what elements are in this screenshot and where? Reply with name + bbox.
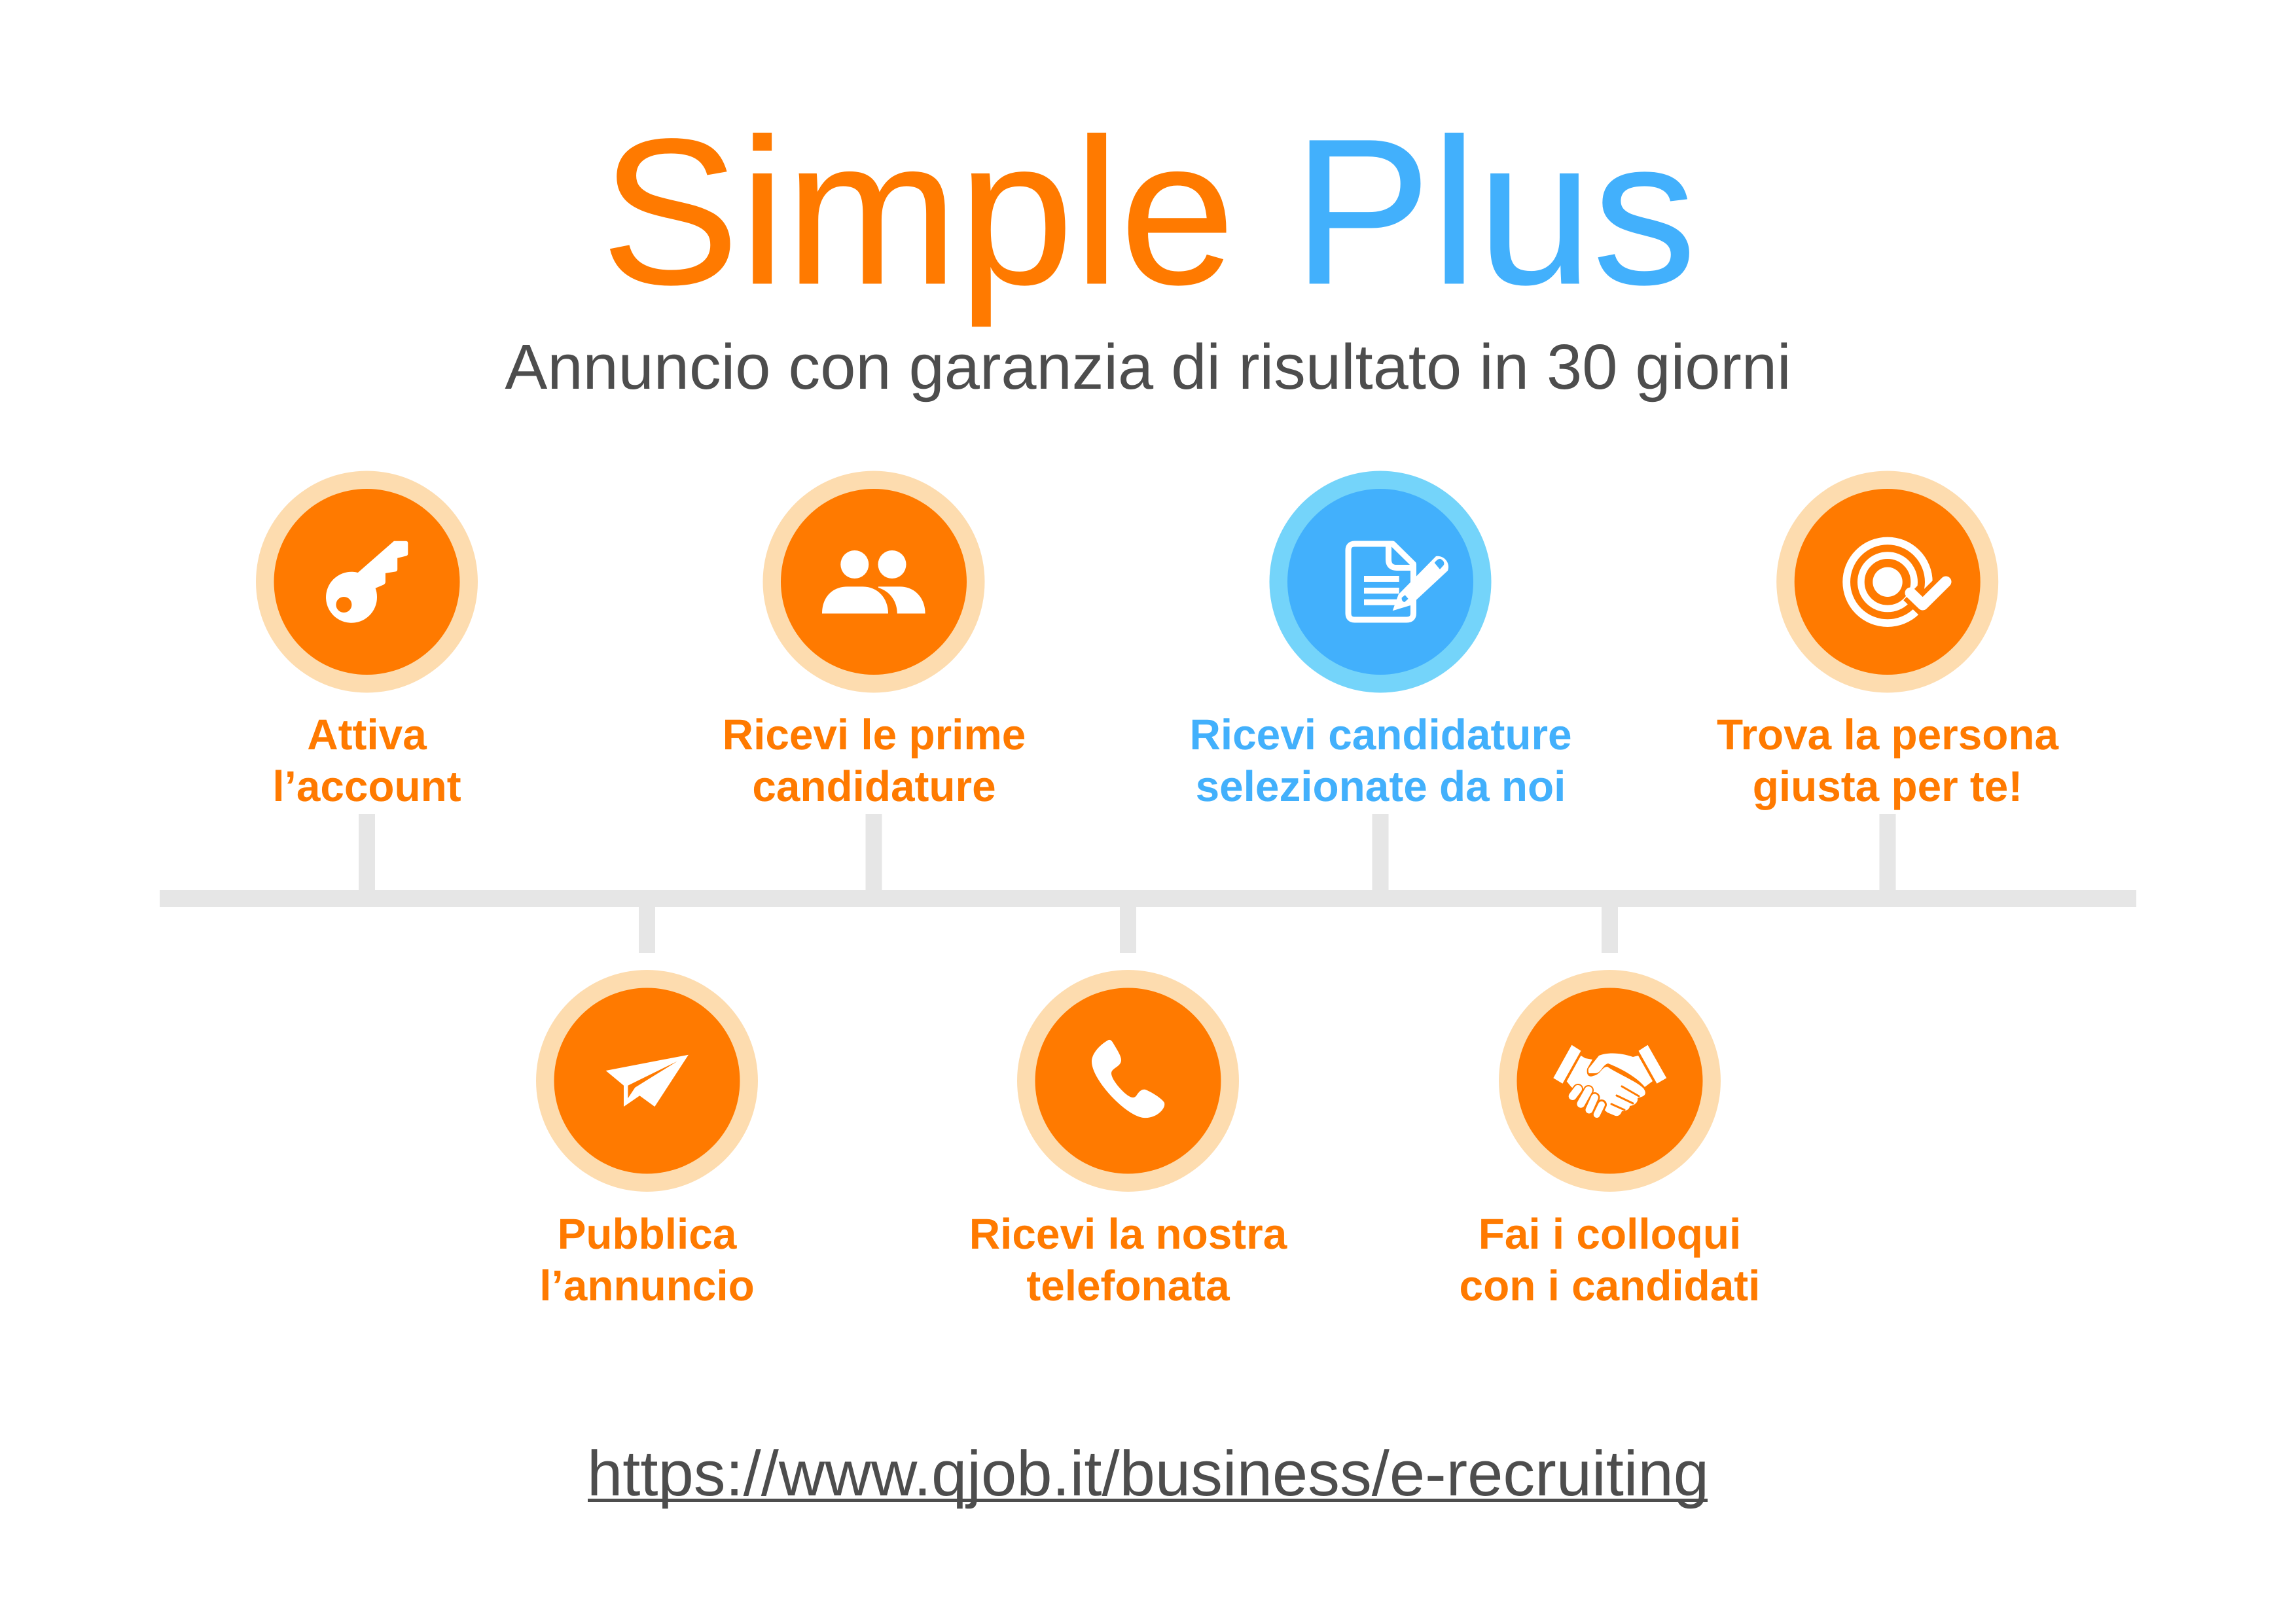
step: ricevi la nostra telefonata — [969, 970, 1287, 1310]
label: Pubblica — [558, 1210, 737, 1258]
timeline — [160, 814, 2136, 953]
step: trova la persona — [1717, 471, 2058, 810]
circle badge — [256, 471, 478, 692]
label: giusta per te! — [1753, 762, 2022, 810]
url link: https://www.qjob.it/business/e-recruiting — [587, 1438, 1709, 1509]
title: Simple Plus — [601, 96, 1696, 329]
label: l’account — [272, 762, 461, 810]
subtitle: Annuncio con garanzia di risultato in 30 giorni — [505, 331, 1791, 402]
label: con i candidati — [1460, 1262, 1760, 1310]
circle badge — [763, 471, 984, 692]
circle badge — [536, 970, 758, 1192]
icon: phone — [1092, 1040, 1164, 1118]
step: pubblica l'annuncio — [536, 970, 758, 1310]
label: Ricevi candidature — [1189, 711, 1572, 758]
icon: paper plane — [606, 1055, 689, 1107]
label: Ricevi la nostra — [969, 1210, 1287, 1258]
label: Fai i colloqui — [1479, 1210, 1741, 1258]
circle badge — [1017, 970, 1239, 1192]
icon: target with check — [1846, 541, 1946, 623]
icon: people — [822, 550, 925, 614]
label: l’annuncio — [539, 1262, 755, 1310]
icon: handshake — [1553, 1045, 1666, 1116]
label: Ricevi le prime — [723, 711, 1026, 758]
label: Trova la persona — [1717, 711, 2058, 758]
icon: key — [326, 541, 408, 623]
step: ricevi le prime candidature — [723, 471, 1026, 810]
label: selezionate da noi — [1196, 762, 1566, 810]
circle badge — [1499, 970, 1721, 1192]
label: candidature — [752, 762, 996, 810]
label: Attiva — [307, 711, 427, 758]
circle badge — [1270, 471, 1491, 692]
label: telefonata — [1026, 1262, 1230, 1310]
step: attiva l'account — [256, 471, 478, 810]
icon: document and pen — [1348, 544, 1448, 620]
circle badge — [1776, 471, 1998, 692]
step: fai i colloqui — [1460, 970, 1760, 1310]
step: ricevi candidature selezionate — [1189, 471, 1572, 810]
